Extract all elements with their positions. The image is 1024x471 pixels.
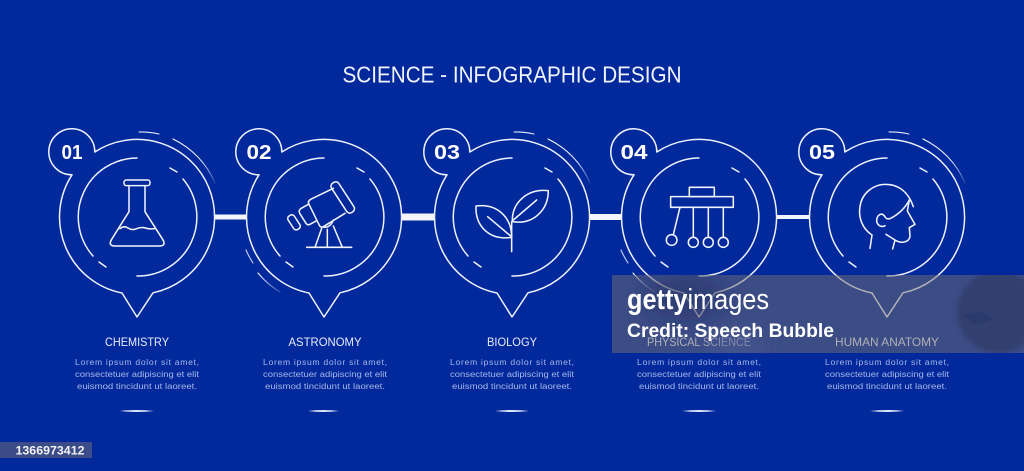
description — [263, 357, 388, 391]
panel: human anatomy — [799, 129, 965, 412]
panel: physical science — [611, 129, 777, 412]
icon: flask — [110, 180, 164, 246]
inner ring — [828, 158, 947, 276]
speech bubble outline — [236, 129, 402, 317]
label: human anatomy: HUMAN ANATOMY — [835, 335, 939, 349]
underline accent — [495, 410, 529, 412]
description: consectetuer adipiscing et elit — [450, 369, 575, 379]
credit text: Credit: Speech Bubble — [627, 320, 834, 342]
underline accent — [682, 410, 716, 412]
description: Lorem ipsum dolor sit amet, — [263, 357, 387, 367]
description — [75, 357, 200, 391]
underline accent — [870, 410, 904, 412]
image id tag — [0, 442, 92, 458]
label: biology: BIOLOGY — [487, 335, 537, 349]
description: euismod tincidunt ut laoreet. — [265, 381, 385, 391]
number 05: 05 — [809, 142, 835, 164]
description: Lorem ipsum dolor sit amet, — [450, 357, 574, 367]
description: consectetuer adipiscing et elit — [637, 369, 762, 379]
number 01: 01 — [62, 142, 82, 164]
image id tag: 1366973412 — [16, 444, 85, 458]
description — [825, 357, 950, 391]
description — [637, 357, 762, 391]
underline accent — [120, 410, 154, 412]
connector 4 — [777, 215, 810, 219]
decorative arcs — [621, 250, 655, 292]
panel: biology — [424, 129, 590, 412]
connector 2 — [402, 214, 435, 220]
description: Lorem ipsum dolor sit amet, — [825, 357, 949, 367]
title: SCIENCE - INFOGRAPHIC DESIGN — [342, 62, 682, 88]
number 02: 02 — [246, 142, 272, 164]
panel: chemistry — [49, 129, 215, 412]
number 04: 04 — [620, 142, 649, 164]
description: consectetuer adipiscing et elit — [75, 369, 200, 379]
watermark band — [612, 275, 1024, 353]
speech bubble outline — [799, 129, 965, 317]
number 03: 03 — [434, 142, 460, 164]
description: Lorem ipsum dolor sit amet, — [75, 357, 199, 367]
connector 3 — [589, 214, 622, 220]
speech bubble outline — [424, 129, 590, 317]
decorative arcs — [514, 132, 590, 183]
inner ring — [453, 158, 572, 276]
icon: telescope — [287, 180, 356, 247]
decorative arcs — [889, 132, 965, 183]
panel: astronomy — [236, 129, 402, 412]
decorative arcs — [139, 132, 215, 183]
description — [450, 357, 575, 391]
inner ring — [640, 158, 759, 276]
icon: human head — [860, 184, 915, 249]
description: consectetuer adipiscing et elit — [825, 369, 950, 379]
description: consectetuer adipiscing et elit — [263, 369, 388, 379]
description: euismod tincidunt ut laoreet. — [639, 381, 759, 391]
label: astronomy: ASTRONOMY — [288, 335, 362, 349]
label: chemistry: CHEMISTRY — [105, 335, 169, 349]
description: Lorem ipsum dolor sit amet, — [637, 357, 761, 367]
inner ring — [265, 158, 384, 276]
decorative arcs — [246, 250, 280, 292]
getty logo text: gettyimages — [627, 284, 769, 316]
underline accent — [308, 410, 339, 412]
connector 1 — [214, 214, 247, 220]
icon: plant — [476, 190, 548, 252]
description: euismod tincidunt ut laoreet. — [77, 381, 197, 391]
speech bubble outline — [611, 129, 777, 317]
icon: newton's cradle — [666, 187, 733, 247]
description: euismod tincidunt ut laoreet. — [452, 381, 572, 391]
label: physical science: PHYSICAL SCIENCE — [647, 335, 751, 349]
inner ring — [78, 158, 197, 276]
speech bubble outline — [49, 129, 215, 317]
description: euismod tincidunt ut laoreet. — [827, 381, 947, 391]
